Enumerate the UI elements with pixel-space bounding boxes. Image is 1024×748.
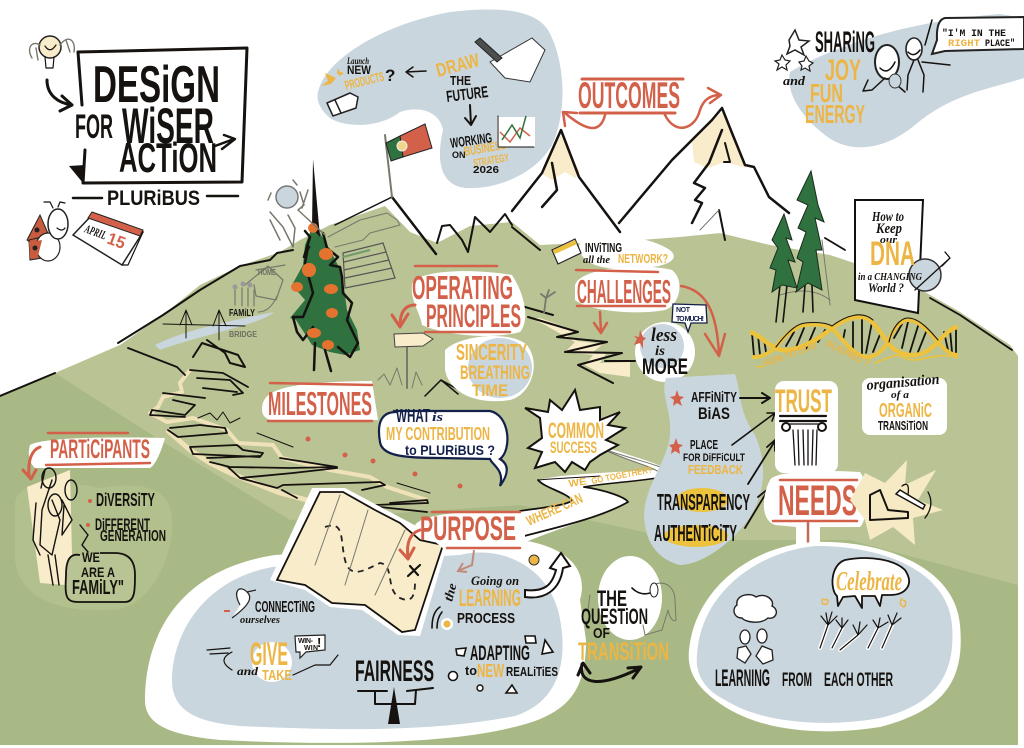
icon: winged light bulb with arrow xyxy=(30,36,74,111)
title block: FOR xyxy=(75,108,113,146)
starburst: common success: SUCCESS xyxy=(550,438,597,457)
section: question of transition with elephant: THE xyxy=(597,586,627,611)
panel: organisation of a organic transition: of a xyxy=(891,390,909,401)
heading: milestones xyxy=(262,381,378,422)
panel: how to keep our DNA: Keep xyxy=(875,221,902,237)
section: adapting to new realities: ADAPTING xyxy=(470,642,530,665)
section: learning process: PROCESS xyxy=(457,610,515,627)
section: question of transition with elephant: OF xyxy=(593,625,610,642)
section: working on business strategy 2026: 2026 xyxy=(473,165,500,176)
icon: person with crystal ball xyxy=(268,180,325,247)
heading: purpose: PURPOSE xyxy=(420,510,516,548)
panel: trust pillar xyxy=(775,381,838,473)
section: adapting to new realities: NEW xyxy=(477,661,504,681)
blue thought cloud: draw the future xyxy=(318,9,563,188)
section: draw the future: FUTURE xyxy=(445,84,489,106)
section: less is more: NOT xyxy=(676,307,691,314)
icon: staircase path with sprout xyxy=(518,290,635,383)
icon: treasure map xyxy=(270,488,448,636)
heading: challenges xyxy=(575,266,725,356)
section: sincerity, breathing time: TIME xyxy=(472,381,508,400)
section: sincerity, breathing time xyxy=(445,336,534,401)
icon: two happy people xyxy=(863,20,950,92)
icon: winding mountain path and roadmap card xyxy=(328,213,400,288)
section: question of transition with elephant xyxy=(578,556,676,681)
speech bubble: we are a family xyxy=(66,525,135,602)
speech bubble: what is my contribution: to PLURiBUS ? xyxy=(405,442,495,458)
heading: outcomes: OUTCOMES xyxy=(578,75,680,116)
panel: how to keep our DNA xyxy=(855,200,950,313)
section: new products: PRODUCTS xyxy=(343,69,386,93)
section: sharing joy: and xyxy=(783,73,806,88)
section: inviting the network: NETWORK? xyxy=(618,251,668,266)
speech bubble: what is my contribution: is xyxy=(432,409,443,424)
section: adapting to new realities: to xyxy=(465,663,477,678)
panel: how to keep our DNA: our xyxy=(880,235,897,246)
DNA helix xyxy=(750,315,958,370)
text: learning from each other: EACH OTHER xyxy=(824,670,893,691)
section: working on business strategy 2026 xyxy=(449,116,535,176)
section: adapting to new realities: REALiTiES xyxy=(506,664,558,679)
section: new products: ? xyxy=(385,66,395,85)
heading: operating principles: OPERATING xyxy=(412,269,513,306)
section: transparency xyxy=(657,440,775,515)
section: inviting the network: INViTING xyxy=(585,240,622,255)
panel: learning from each other xyxy=(689,542,961,731)
section: place for difficult feedback xyxy=(669,413,775,477)
winding road with milestones xyxy=(128,348,462,512)
section: give and take: and xyxy=(237,664,259,678)
winding ribbon path: where can we go together xyxy=(512,445,670,548)
panel: how to keep our DNA: World ? xyxy=(868,280,904,295)
section: participants: GENERATION xyxy=(100,528,166,545)
section: sharing joy: ENERGY xyxy=(805,99,865,129)
section: place for difficult feedback: FEEDBACK xyxy=(688,462,743,477)
section: sincerity, breathing time: BREATHING xyxy=(460,363,530,384)
title block: WiSER xyxy=(122,98,214,154)
title block: ACTiON xyxy=(119,134,217,181)
section: less is more: is xyxy=(655,344,666,359)
section: place for difficult feedback: PLACE xyxy=(690,437,718,452)
section: question of transition with elephant: QUESTiON xyxy=(581,604,648,629)
speech bubble: what is my contribution: WHAT xyxy=(396,406,430,426)
panel: how to keep our DNA: DNA xyxy=(870,235,915,273)
heading: challenges: CHALLENGES xyxy=(577,273,671,310)
section: learning process xyxy=(432,553,570,630)
text: learning from each other: FROM xyxy=(782,670,812,691)
section: inviting the network xyxy=(552,236,674,268)
section: adapting to new realities xyxy=(448,636,558,693)
section: working on business strategy 2026: WORKING xyxy=(449,129,493,151)
speech bubble: I'm in the right place: PLACE" xyxy=(985,38,1015,50)
panel: organisation of a organic transition: ORGANiC xyxy=(879,400,932,422)
icon: decorated central tree xyxy=(290,159,360,371)
section: less is more xyxy=(634,304,707,382)
section: draw the future: DRAW xyxy=(434,50,482,82)
speech bubble: celebrate xyxy=(822,558,909,608)
landscape background xyxy=(0,206,1018,745)
signpost xyxy=(378,333,470,396)
section: affinity bias: AFFiNiTY xyxy=(691,389,737,406)
section: sharing joy: JOY xyxy=(825,54,861,87)
starburst: common success xyxy=(525,390,625,472)
panel: trust pillar: TRUST xyxy=(775,383,832,419)
section: authenticity xyxy=(654,489,768,547)
DNA helix: HOW TO STAY xyxy=(762,340,820,370)
section: place for difficult feedback: FOR DiFFiCULT xyxy=(683,452,745,464)
section: less is more: TO MUCH! xyxy=(676,316,704,323)
icon: raised hands xyxy=(820,612,901,650)
section: give and take: WIN xyxy=(304,645,318,652)
mountains xyxy=(0,108,1012,396)
section: less is more: less xyxy=(651,325,677,346)
icon: home and family: HOME xyxy=(258,268,276,277)
section: less is more: MORE xyxy=(642,354,688,379)
section: participants: DiVERSiTY xyxy=(96,490,155,510)
section: give and take xyxy=(207,635,338,684)
winding ribbon path: where can we go together: WHERE CAN xyxy=(524,490,585,529)
section: new products xyxy=(321,56,426,116)
section: inviting the network: all the xyxy=(583,255,611,266)
title block: DESiGN xyxy=(93,56,220,114)
icon: calendar April 15: 15 xyxy=(105,229,128,253)
heading: operating principles: PRINCIPLES xyxy=(426,298,521,334)
icon: pine trees xyxy=(770,171,830,322)
icon: ladybug xyxy=(27,202,68,261)
speech bubble: we are a family: ARE A xyxy=(81,564,115,580)
starburst: common success: COMMON xyxy=(548,418,604,443)
section: new products: NEW xyxy=(347,63,372,77)
speech bubble: we are a family: WE xyxy=(82,549,100,565)
section: fairness with scales: FAIRNESS xyxy=(355,655,434,688)
section: sincerity, breathing time: SINCERITY xyxy=(456,339,527,365)
section: transparency: TRANSPARENCY xyxy=(657,489,750,515)
speech bubble: we are a family: FAMiLY" xyxy=(72,577,124,599)
section: working on business strategy 2026: STRATEGY xyxy=(472,152,510,170)
section: new products: Launch xyxy=(346,56,369,66)
section: give and take: TAKE xyxy=(262,667,292,684)
icon: calendar April 15: APRIL xyxy=(82,221,108,242)
panel: organisation of a organic transition: organisation xyxy=(866,372,940,394)
panel: organisation of a organic transition: TRANSiTiON xyxy=(878,418,928,433)
section: give and take: ! xyxy=(317,635,321,650)
section: participants: DiFFERENT xyxy=(95,515,150,534)
title block: PLURiBUS xyxy=(107,187,200,210)
heading: needs xyxy=(764,471,867,575)
section: connecting ourselves: ourselves xyxy=(240,614,280,626)
speech bubble: what is my contribution xyxy=(379,406,507,486)
speech bubble: I'm in the right place xyxy=(932,17,1024,54)
heading: purpose xyxy=(400,510,525,572)
heading: operating principles xyxy=(392,266,525,336)
panel: organisation of a organic transition xyxy=(862,372,947,435)
blue cloud: sharing joy xyxy=(789,14,1024,147)
title block xyxy=(69,48,247,210)
section: draw the future: THE xyxy=(450,73,471,88)
infographic canvas: SHARiNG xyxy=(815,26,875,59)
flag of Portugal xyxy=(385,124,432,197)
blue blob: trust factors xyxy=(644,374,763,565)
section: connecting ourselves: CONNECTiNG xyxy=(255,599,315,616)
section: working on business strategy 2026: BUSINESS xyxy=(463,137,507,159)
speech bubble: I'm in the right place: "I'M IN THE xyxy=(942,28,1006,40)
section: authenticity: AUTHENTiCiTY xyxy=(654,520,737,546)
speech bubble: what is my contribution: MY CONTRIBUTION xyxy=(386,424,490,444)
heading: needs: NEEDS xyxy=(778,477,857,525)
section: sharing joy: FUN xyxy=(810,78,843,108)
section: connecting ourselves xyxy=(224,589,315,626)
DNA helix: ALIGNED ? xyxy=(824,338,871,369)
section: learning process: the xyxy=(440,581,460,603)
icon: boot and pickaxe on star xyxy=(850,460,943,545)
section: learning process: Going on xyxy=(471,573,519,588)
icon: river and bridge: BRIDGE xyxy=(229,330,258,339)
panel: how to keep our DNA: How to xyxy=(871,210,904,225)
winding ribbon path: where can we go together: WE xyxy=(568,477,588,490)
winding ribbon path: where can we go together: GO TOGETHER? xyxy=(590,464,653,486)
section: question of transition with elephant: TRANSiTiON xyxy=(578,638,669,666)
heading: outcomes xyxy=(563,75,721,128)
section: draw the future xyxy=(434,38,545,125)
section: give and take: GIVE xyxy=(250,636,288,672)
section: participants xyxy=(15,433,172,610)
heading: milestones: MILESTONES xyxy=(268,385,372,422)
panel: how to keep our DNA: in a CHANGING xyxy=(858,271,922,283)
text: learning from each other: LEARNING xyxy=(715,665,770,692)
icon: home and family: FAMiLY xyxy=(229,308,255,319)
section: participants: PARTiCiPANTS xyxy=(50,434,150,464)
section: learning process: LEARNING xyxy=(459,585,521,612)
section: fairness with scales xyxy=(355,655,434,724)
panel: purpose blue area xyxy=(145,540,586,743)
icon: two people under a thought cloud xyxy=(734,595,776,664)
section: working on business strategy 2026: ON xyxy=(452,150,466,160)
speech bubble: I'm in the right place: RIGHT xyxy=(948,39,980,50)
speech bubble: celebrate: Celebrate xyxy=(836,566,902,596)
icon: river and bridge xyxy=(155,310,274,367)
section: sharing joy xyxy=(775,26,875,129)
section: give and take: WIN- xyxy=(298,638,314,645)
icon: home and family xyxy=(229,265,285,319)
section: affinity bias xyxy=(670,389,770,423)
section: affinity bias: BiAS xyxy=(698,404,730,423)
icon: calendar April 15 xyxy=(73,212,143,265)
